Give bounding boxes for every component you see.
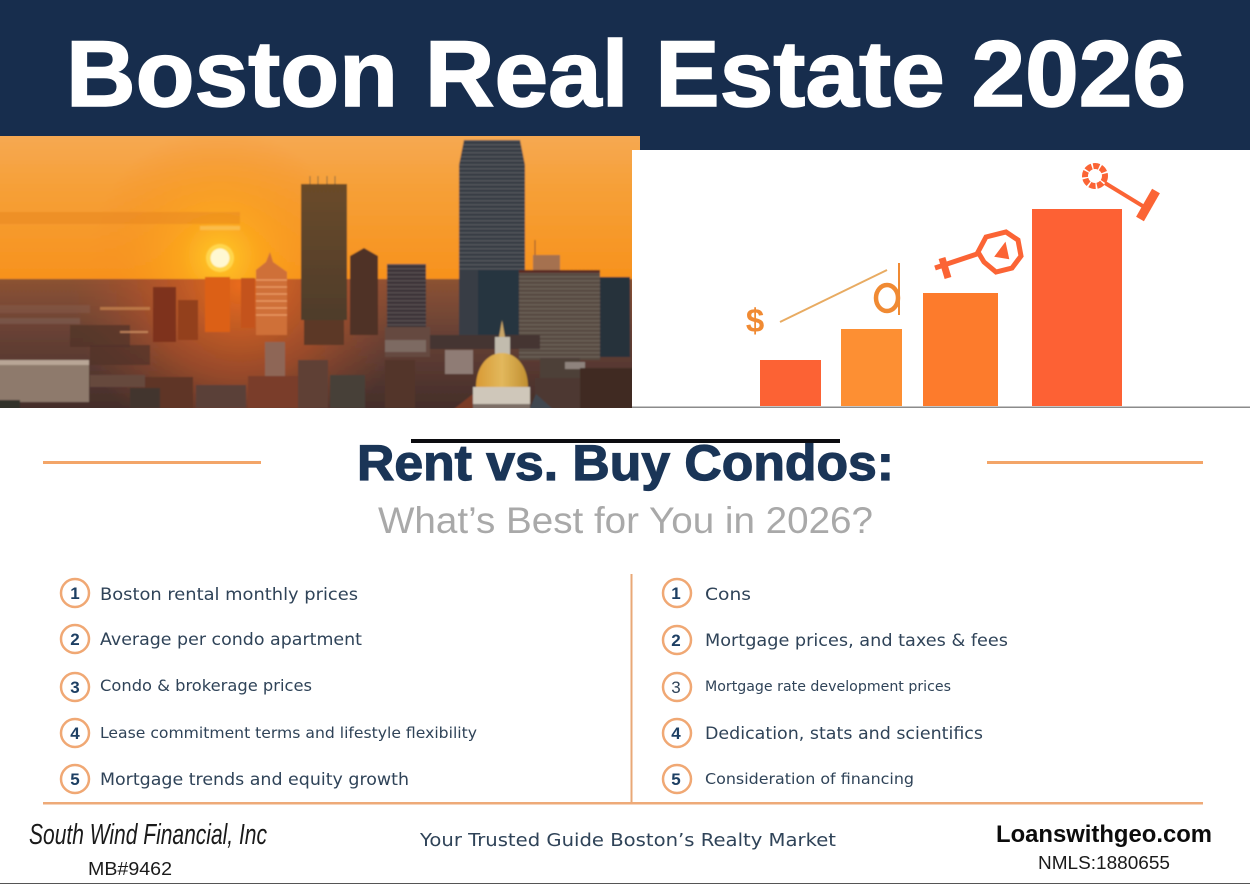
left accent rule [43,461,261,464]
item 2 [61,625,362,653]
item 5: 5 [70,770,80,789]
bar 4 [1032,209,1122,406]
item 2 [663,626,1008,654]
item 4 [61,719,477,747]
tagline: Your Trusted Guide Boston’s Realty Market [419,830,836,851]
item 5 [61,765,409,793]
item 5 [663,765,914,793]
item 5: Consideration of financing [705,770,914,788]
item 1: 1 [671,584,681,603]
company name: South Wind Financial, Inc [29,819,267,851]
item 1: Boston rental monthly prices [100,585,358,605]
nmls number: NMLS:1880655 [1038,853,1170,873]
list: renting [61,579,477,793]
item 4 [663,719,983,747]
licence number: MB#9462 [88,859,172,879]
column divider [630,574,632,804]
item 4: Dedication, stats and scientifics [705,724,983,744]
item 3: 3 [671,678,681,697]
item 3: Mortgage rate development prices [705,679,951,695]
item 5: Mortgage trends and equity growth [100,770,409,790]
icon: key on fourth bar [1085,166,1156,219]
item 2: Average per condo apartment [100,630,362,650]
icon: dollar sign: $ [746,302,764,339]
item 4: 4 [671,724,681,743]
trend line [780,270,887,322]
item 4: Lease commitment terms and lifestyle flexibility [100,724,477,742]
bar 3 [923,293,998,406]
bar 2 [841,329,902,406]
item 1 [61,579,358,607]
footer [29,819,1212,879]
photo: Boston skyline at sunset [0,136,640,408]
bottom edge [0,883,1250,884]
item 3 [61,673,312,701]
item 1: 1 [70,584,80,603]
section heading [43,435,1203,541]
subheading text: What’s Best for You in 2026? [378,500,873,541]
website: Loanswithgeo.com [996,821,1212,848]
item 2: Mortgage prices, and taxes & fees [705,631,1008,651]
item 2: 2 [70,630,80,649]
item 3 [663,673,951,701]
list: buying [663,579,1008,793]
title banner [0,0,1250,150]
icon: key on third bar [935,232,1021,278]
heading rule [411,439,840,443]
icon: letter d [876,263,899,315]
title: Boston Real Estate 2026 [66,21,1186,126]
item 1: Cons [705,585,751,605]
right accent rule [987,461,1203,464]
footer rule [43,802,1203,804]
item 5: 5 [671,770,681,789]
lower city blocks [0,362,89,402]
item 3: 3 [70,678,80,697]
item 4: 4 [70,724,80,743]
item 3: Condo & brokerage prices [100,676,312,695]
item 1 [663,579,751,607]
bar 1 [760,360,821,406]
item 2: 2 [671,631,681,650]
heading text: Rent vs. Buy Condos: [357,435,894,491]
chart panel: rising bars with keys [632,150,1250,408]
